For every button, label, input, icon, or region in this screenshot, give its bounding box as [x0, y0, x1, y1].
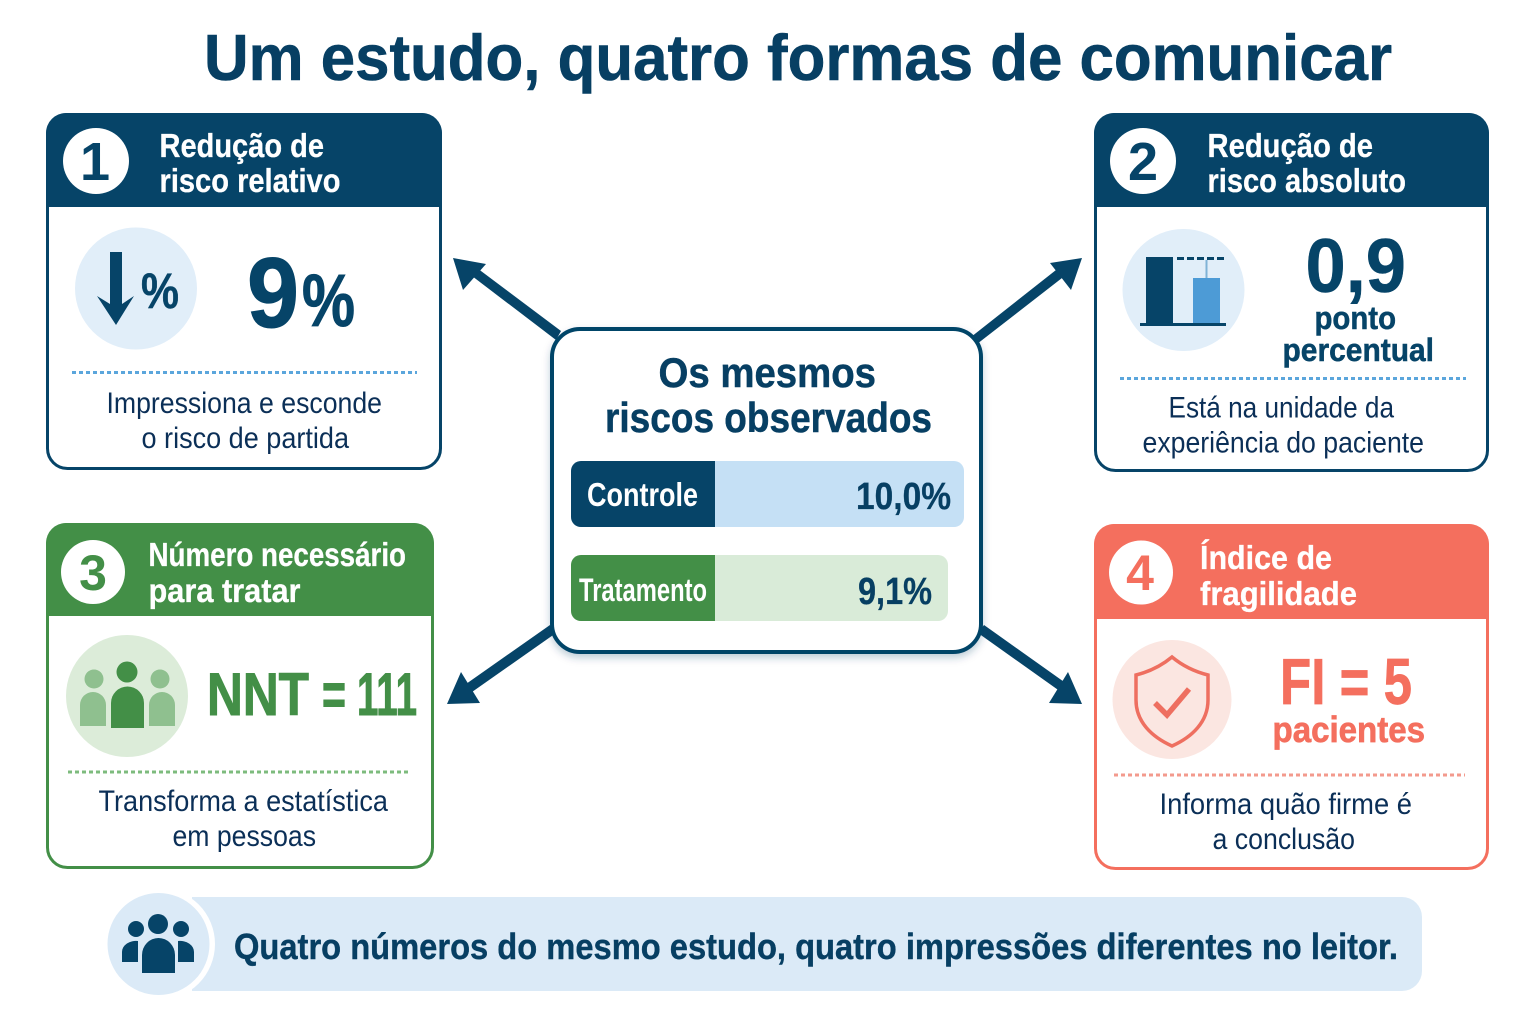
value: FI = 5 pacientes: pacientes — [1272, 709, 1425, 750]
value: NNT = 111 — [207, 661, 417, 728]
card 2 header: risco absoluto — [1208, 162, 1406, 199]
arrow: to card 1 — [453, 258, 561, 340]
panel: center, same observed risks — [552, 329, 981, 652]
description — [106, 387, 382, 455]
description: Informa quão firme é — [1160, 788, 1412, 821]
bar: tratamento: Tratamento — [579, 572, 707, 608]
icon: down arrow with percent: % — [141, 263, 179, 319]
card 3 header: Número necessário — [148, 536, 406, 573]
panel: card 1, relative risk reduction — [46, 113, 442, 468]
description: experiência do paciente — [1142, 426, 1424, 460]
value: 9%: 9 — [247, 237, 299, 348]
card 1 header: 1 — [80, 132, 110, 192]
bar: tratamento — [571, 555, 948, 621]
card 3 header — [46, 523, 434, 616]
description: Está na unidade da — [1168, 392, 1394, 424]
description: em pessoas — [172, 820, 316, 853]
panel: card 4, fragility index — [1094, 524, 1489, 868]
icon: group of people — [108, 893, 210, 995]
value: FI = 5 pacientes: FI = 5 — [1280, 645, 1412, 718]
card 3 header: 3 — [79, 545, 107, 601]
card 2 header: Redução de — [1208, 127, 1373, 164]
description — [1142, 392, 1424, 460]
card 3 header: para tratar — [148, 572, 301, 609]
card 4 header: 4 — [1126, 545, 1154, 601]
value: 0,9 ponto percentual — [1282, 224, 1434, 368]
icon: bar comparison — [1122, 229, 1244, 351]
value: 0,9 ponto percentual: ponto — [1314, 300, 1396, 336]
icon: shield with check — [1112, 640, 1232, 759]
description — [98, 785, 388, 853]
footer message: Quatro números do mesmo estudo, quatro impressões diferentes no leitor. — [234, 926, 1398, 967]
description — [1160, 788, 1412, 856]
card 1 header: risco relativo — [160, 162, 340, 199]
card 2 header — [1094, 113, 1489, 207]
center heading: riscos observados — [605, 394, 932, 441]
value: 0,9 ponto percentual: percentual — [1282, 332, 1434, 368]
card 4 header — [1094, 524, 1489, 619]
arrow: to card 3 — [447, 625, 556, 704]
bar: tratamento: 9,1% — [858, 571, 932, 613]
arrow: to card 4 — [978, 625, 1082, 704]
card 1 header: Redução de — [160, 127, 324, 164]
bar: controle: 10,0% — [856, 476, 951, 518]
icon: people — [66, 635, 188, 757]
card 2 header: 2 — [1128, 132, 1158, 192]
value: NNT = 111: = — [322, 661, 346, 728]
arrow: to card 2 — [971, 258, 1082, 344]
value: 9%: % — [302, 259, 355, 342]
panel: card 2, absolute risk reduction — [1094, 113, 1489, 470]
value: 9% — [247, 237, 355, 348]
footer banner — [103, 888, 1422, 1000]
card 4 header: fragilidade — [1200, 575, 1357, 612]
description: Transforma a estatística — [98, 785, 388, 818]
panel: card 3, number needed to treat — [46, 523, 434, 868]
bar: controle: Controle — [587, 476, 698, 513]
arrows from center to the four cards — [447, 258, 1082, 704]
value: NNT = 111: NNT — [207, 661, 309, 728]
value: 0,9 ponto percentual: 0,9 — [1306, 224, 1406, 309]
center heading — [605, 349, 932, 441]
description: Impressiona e esconde — [106, 387, 382, 420]
card 4 header: Índice de — [1200, 539, 1332, 576]
description: a conclusão — [1212, 823, 1355, 856]
description: o risco de partida — [142, 422, 349, 455]
value: NNT = 111: 111 — [357, 661, 417, 728]
center heading: Os mesmos — [658, 349, 876, 396]
title: Um estudo, quatro formas de comunicar — [204, 21, 1392, 94]
value: FI = 5 pacientes — [1272, 645, 1425, 750]
bar: controle — [571, 461, 964, 527]
card 1 header — [46, 113, 442, 207]
icon: down arrow with percent — [75, 228, 197, 350]
